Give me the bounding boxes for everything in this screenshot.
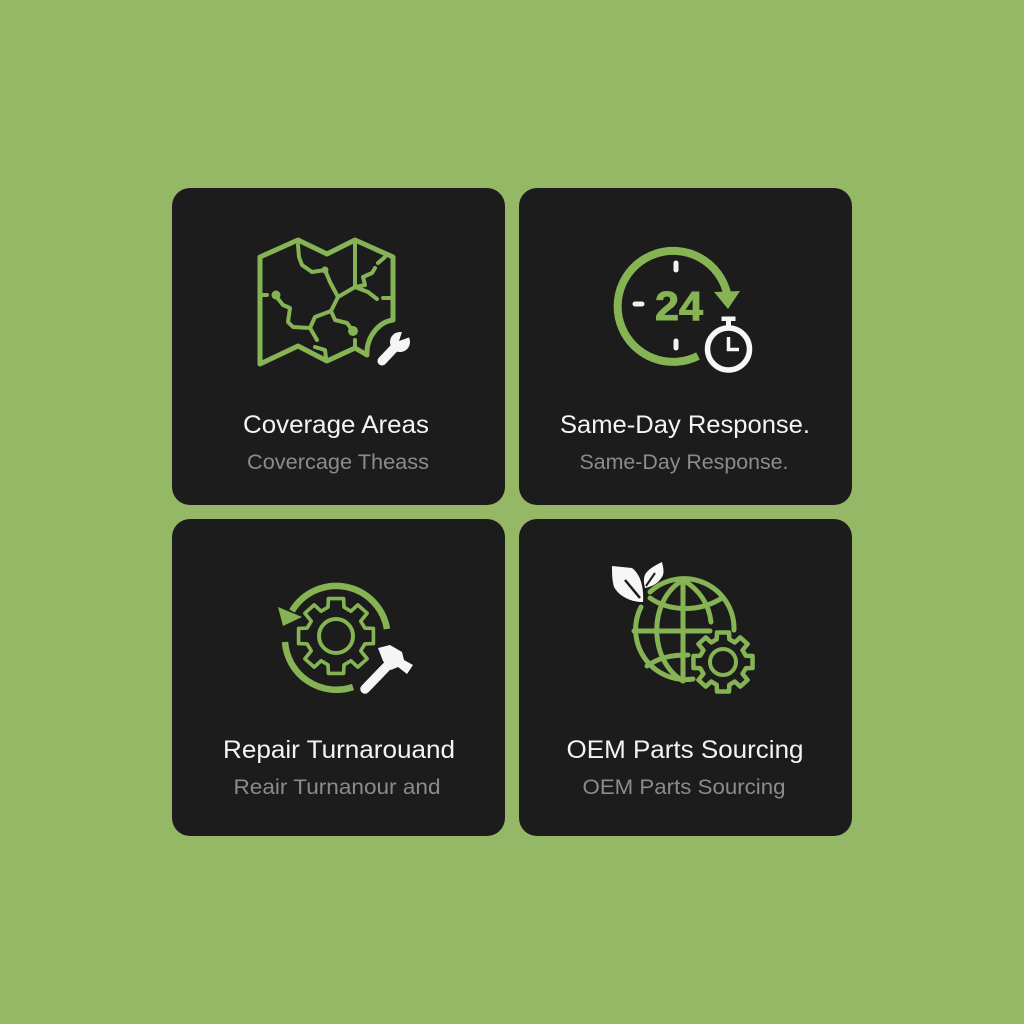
heading: coverage areas: Coverage Areas: [243, 411, 429, 439]
panel: repair turnaround: [172, 519, 505, 836]
icon: map with wrench: [260, 240, 413, 364]
icon: wrench: [382, 329, 413, 361]
heading: repair turnaround: Repair Turnarouand: [223, 736, 455, 764]
subtext: same-day response: Same-Day Response.: [580, 451, 788, 474]
panel: oem parts sourcing: [519, 519, 852, 836]
icon: stopwatch: [708, 317, 750, 370]
icon: hammer: [365, 645, 413, 689]
number: 24: 24: [655, 283, 703, 329]
subtext: repair turnaround: Reair Turnanour and: [234, 776, 440, 799]
icon: globe: [634, 579, 734, 681]
subtext: oem parts sourcing: OEM Parts Sourcing: [582, 776, 786, 799]
icon: gear cycle with hammer: [278, 586, 413, 690]
icon: gear: [299, 599, 373, 673]
subtext: coverage areas: Covercage Theass: [247, 451, 429, 474]
panel: same-day response: [519, 188, 852, 505]
icon: globe with leaves and gear: [612, 562, 753, 692]
icon: leaves: [612, 562, 664, 602]
heading: same-day response: Same-Day Response.: [560, 411, 810, 439]
icon: small gear: [693, 632, 753, 692]
panel: coverage areas: [172, 188, 505, 505]
icon: 24-hour clock with stopwatch: [618, 251, 750, 370]
heading: oem parts sourcing: OEM Parts Sourcing: [566, 736, 804, 764]
